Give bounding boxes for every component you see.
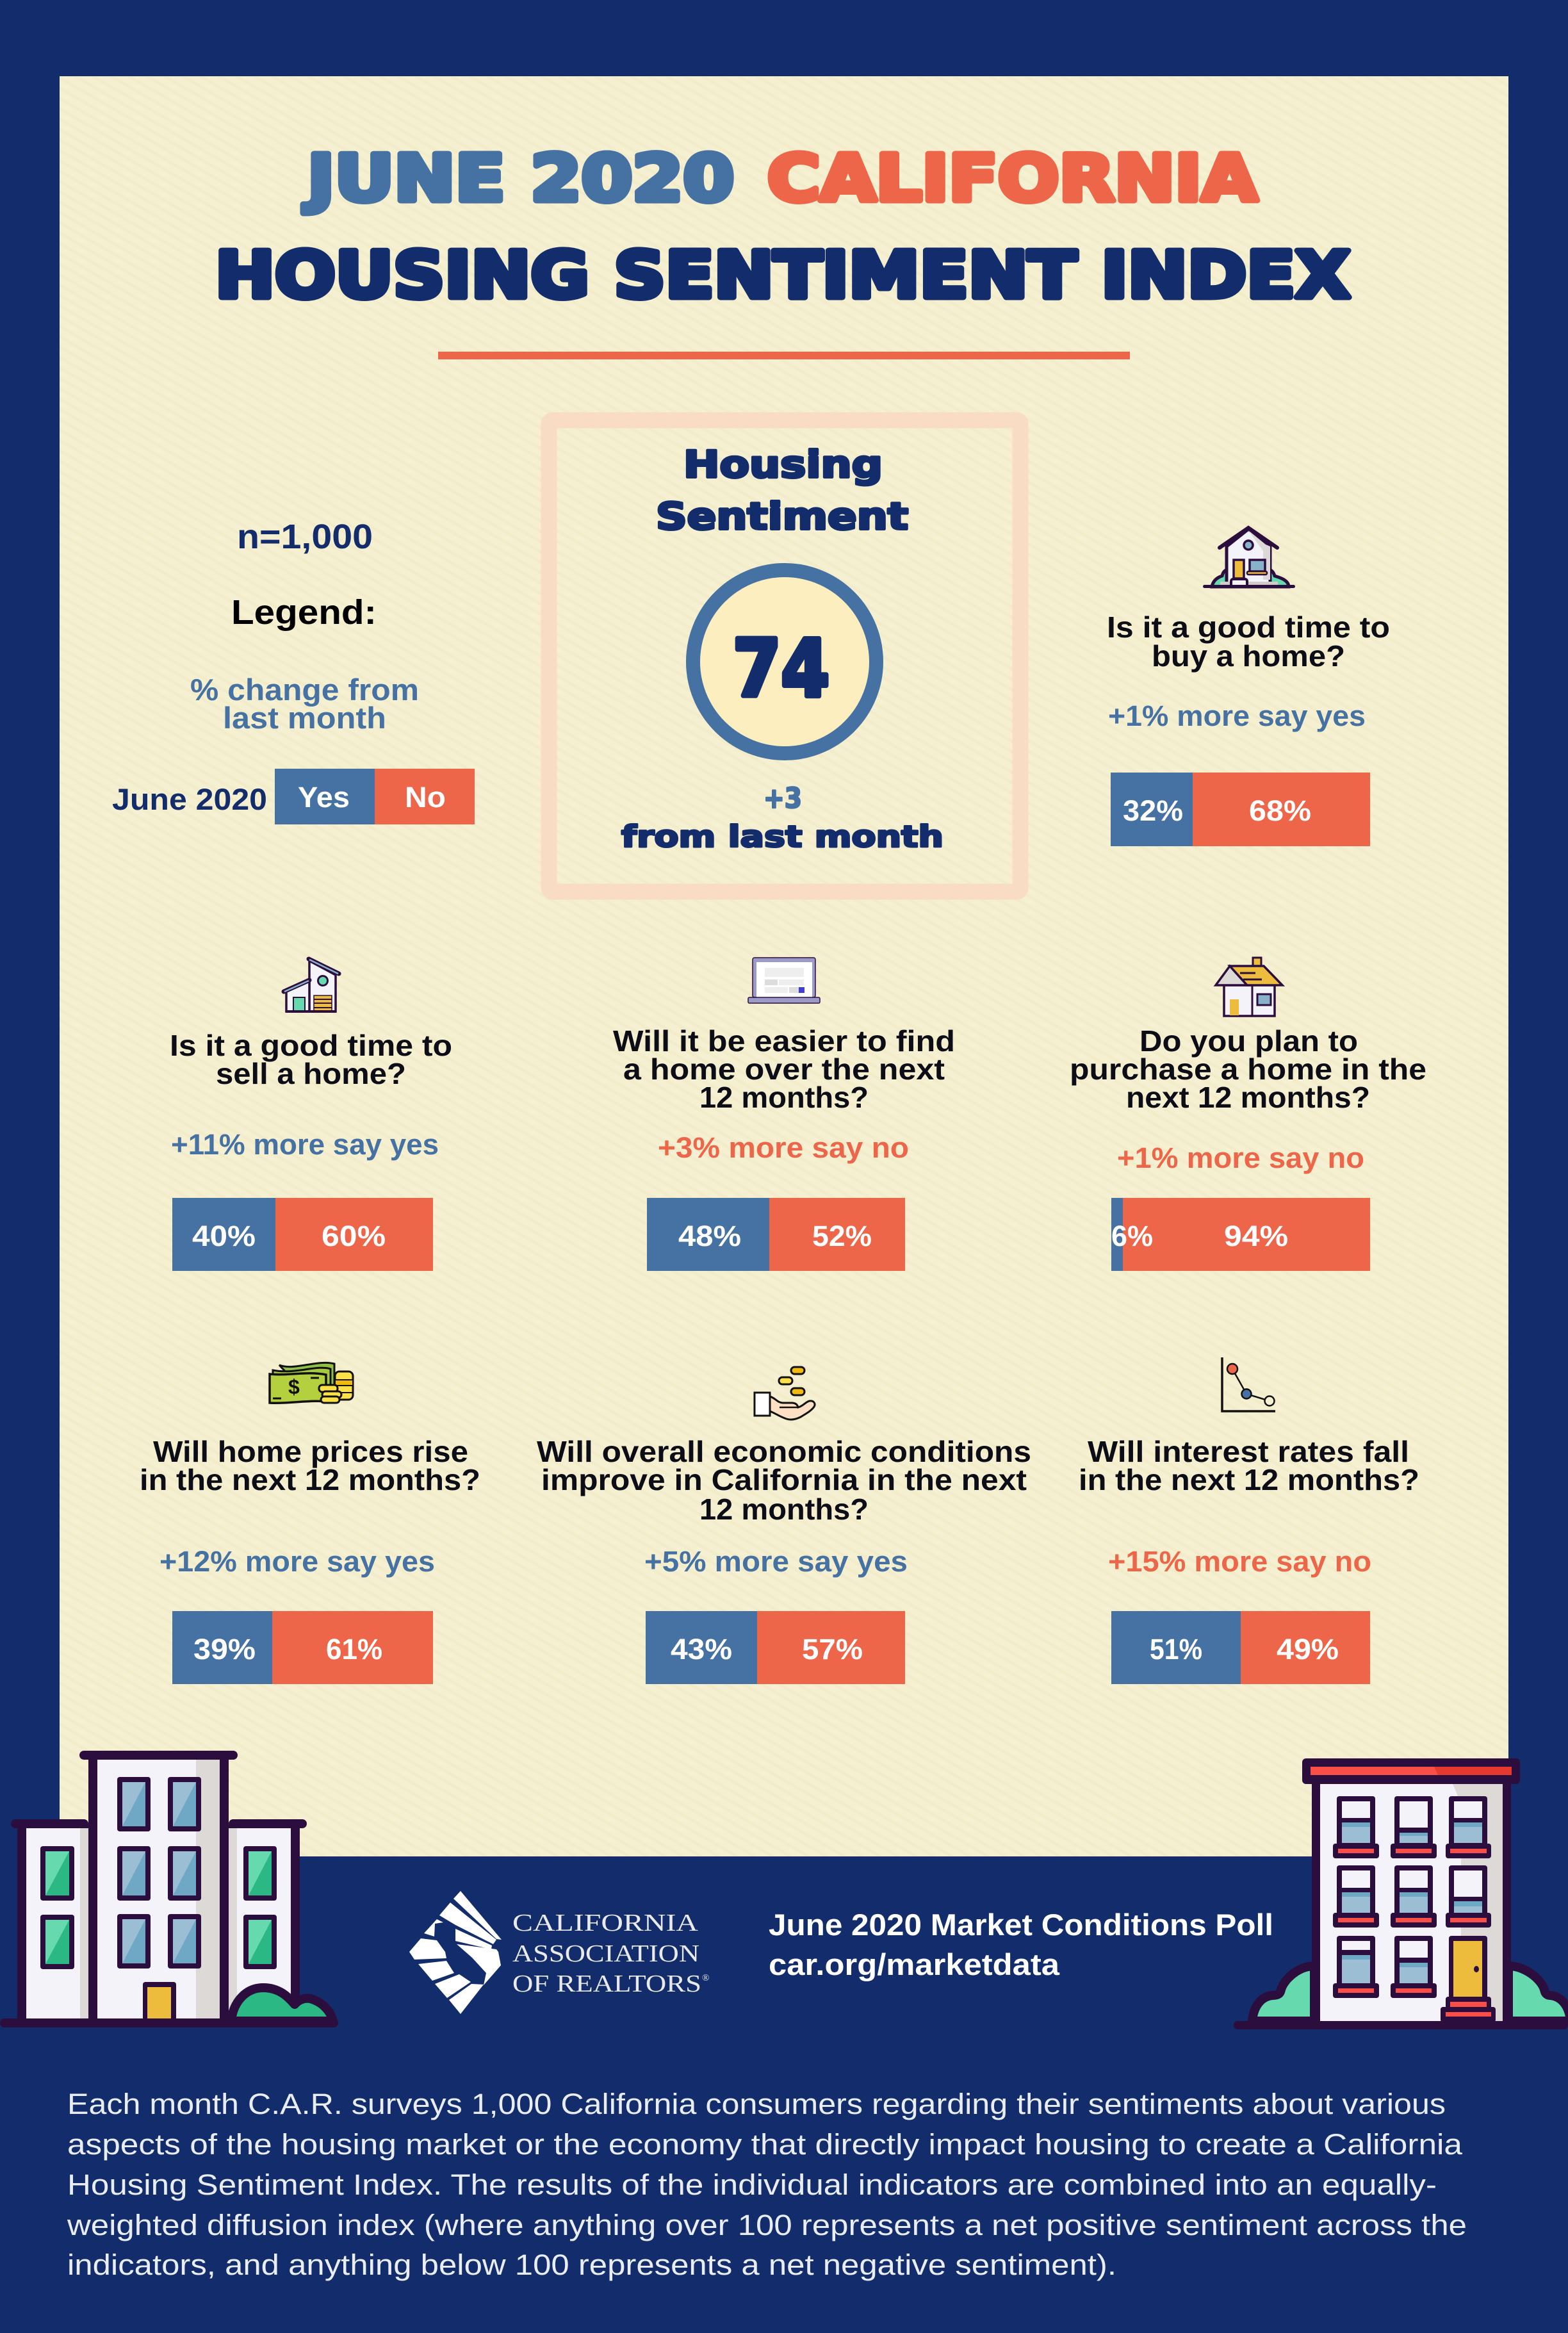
question: purchase a home in the — [1070, 1052, 1426, 1086]
panel: legend: June 2020 — [112, 782, 267, 816]
bushes — [1252, 1966, 1568, 2021]
question — [537, 1435, 1031, 1526]
bar: 32 yes 68 no — [1111, 773, 1370, 846]
panel: housing sentiment score: 74 — [733, 623, 829, 714]
title: JUNE 2020 — [303, 141, 734, 216]
methodology paragraph: aspects of the housing market or the economy that directly impact housing to create a California — [67, 2128, 1463, 2161]
methodology paragraph: Each month C.A.R. surveys 1,000 California consumers regarding their sentiments about various — [67, 2088, 1446, 2120]
bar: 39 yes 61 no: 39% — [193, 1633, 256, 1666]
bar: 40 yes 60 no: 40% — [192, 1220, 256, 1252]
bar: 32 yes 68 no: 32% — [1123, 794, 1183, 827]
panel: good time to buy — [1107, 528, 1390, 846]
logo wordmark: ® — [702, 1973, 709, 1983]
panel: housing sentiment score: Housing — [683, 443, 883, 486]
bar: 40 yes 60 no: 60% — [322, 1220, 386, 1252]
change label: +3% more say no — [658, 1131, 909, 1164]
question: 12 months? — [699, 1081, 869, 1114]
question: buy a home? — [1152, 639, 1345, 673]
change label: +15% more say no — [1108, 1545, 1371, 1578]
panel: legend: % change from — [190, 673, 419, 707]
bar: 6 yes 94 no: 6% — [1111, 1220, 1153, 1252]
question: improve in California in the next — [541, 1463, 1027, 1496]
bar: 39 yes 61 no: 61% — [326, 1633, 382, 1666]
question — [613, 1024, 955, 1114]
title: HOUSING SENTIMENT INDEX — [215, 238, 1350, 313]
question: sell a home? — [216, 1057, 406, 1090]
change label: +1% more say no — [1117, 1142, 1364, 1174]
bar: 48 yes 52 no: 48% — [678, 1220, 741, 1252]
question: Is it a good time to — [170, 1029, 452, 1062]
bar: 51 yes 49 no: 49% — [1277, 1633, 1339, 1666]
panel: home prices — [140, 1363, 480, 1684]
question — [170, 1029, 452, 1090]
panel: housing sentiment score — [549, 420, 1020, 892]
title: CALIFORNIA — [767, 141, 1257, 216]
footer source text — [769, 1908, 1273, 1981]
panel: housing sentiment score: +3 — [764, 782, 802, 815]
methodology paragraph — [67, 2088, 1467, 2281]
question — [140, 1435, 480, 1496]
bar: 40 yes 60 no — [172, 1198, 433, 1271]
icon: money and coins: $ — [288, 1375, 300, 1398]
logo wordmark: CALIFORNIA — [512, 1910, 699, 1936]
door and steps — [1441, 1936, 1496, 2022]
question: in the next 12 months? — [1079, 1463, 1419, 1496]
logo: California Association of Realtors — [409, 1891, 709, 2014]
panel: legend: last month — [223, 701, 386, 735]
question: 12 months? — [699, 1493, 869, 1526]
panel: interest rates — [1079, 1357, 1419, 1684]
icon: hand with coins — [755, 1367, 815, 1420]
question: Will home prices rise — [153, 1435, 468, 1468]
title — [215, 141, 1350, 313]
bar: 39 yes 61 no — [172, 1611, 433, 1684]
bar: 48 yes 52 no: 52% — [812, 1220, 872, 1252]
footer source text: June 2020 Market Conditions Poll — [769, 1908, 1273, 1942]
panel: legend: Yes — [298, 781, 350, 814]
icon: yellow roof house — [1216, 958, 1282, 1016]
cream panel — [60, 76, 1508, 1856]
footer source text: car.org/marketdata — [769, 1947, 1060, 1981]
panel: housing sentiment score: Sentiment — [656, 495, 908, 538]
change label: +5% more say yes — [644, 1545, 908, 1578]
title rule — [438, 352, 1130, 359]
methodology paragraph: Housing Sentiment Index. The results of the individual indicators are combined into an equally- — [67, 2168, 1437, 2201]
logo mark — [409, 1891, 502, 2014]
question: Will interest rates fall — [1088, 1435, 1409, 1468]
panel: good time to sell — [170, 959, 452, 1271]
question — [1070, 1024, 1426, 1114]
logo wordmark — [512, 1910, 709, 1997]
icon: falling line chart — [1222, 1357, 1275, 1411]
illustration: right apartment building — [1234, 1758, 1568, 2029]
question — [1079, 1435, 1419, 1496]
window sills — [1333, 1844, 1491, 1998]
panel: easier to find — [613, 958, 955, 1271]
panel: economic conditions — [537, 1367, 1031, 1684]
bar: 6 yes 94 no — [1111, 1198, 1370, 1271]
bar: 32 yes 68 no: 68% — [1249, 794, 1311, 827]
icon: sell house — [284, 959, 339, 1013]
change label: +11% more say yes — [171, 1128, 439, 1161]
panel: plan to purchase — [1070, 958, 1426, 1271]
side wing windows — [40, 1846, 277, 1969]
door — [143, 1982, 176, 2020]
illustration: left apartment building — [0, 1751, 338, 2027]
change label: +12% more say yes — [159, 1545, 435, 1578]
window grid — [1337, 1796, 1487, 1988]
change label: +1% more say yes — [1108, 700, 1366, 732]
question: a home over the next — [623, 1052, 945, 1086]
question: Will it be easier to find — [613, 1024, 955, 1058]
question: next 12 months? — [1126, 1081, 1370, 1114]
question: Will overall economic conditions — [537, 1435, 1031, 1468]
logo wordmark: ASSOCIATION — [512, 1940, 699, 1967]
question: in the next 12 months? — [140, 1463, 480, 1496]
logo wordmark: OF REALTORS — [512, 1970, 701, 1997]
bar: 51 yes 49 no — [1111, 1611, 1370, 1684]
question — [1107, 610, 1390, 673]
icon: money and coins — [270, 1363, 353, 1403]
panel: housing sentiment score: from last month — [621, 819, 943, 854]
bar: 48 yes 52 no — [647, 1198, 905, 1271]
question: Do you plan to — [1139, 1024, 1358, 1058]
question: Is it a good time to — [1107, 610, 1390, 644]
bush — [231, 1988, 333, 2021]
central tower windows — [117, 1777, 201, 1969]
bar: 43 yes 57 no: 57% — [802, 1633, 863, 1666]
panel: legend: No — [405, 781, 446, 814]
bar: 43 yes 57 no — [646, 1611, 905, 1684]
methodology paragraph: weighted diffusion index (where anything over 100 represents a net positive sentiment across the — [67, 2209, 1467, 2241]
panel: legend: n=1,000 — [237, 518, 373, 556]
methodology paragraph: indicators, and anything below 100 represents a net negative sentiment). — [67, 2248, 1116, 2281]
panel: legend: Legend: — [231, 593, 377, 632]
bar: 51 yes 49 no: 51% — [1150, 1633, 1202, 1666]
bar: 6 yes 94 no: 94% — [1224, 1220, 1288, 1252]
bar: 43 yes 57 no: 43% — [671, 1633, 732, 1666]
panel: legend — [112, 518, 475, 824]
icon: house — [1203, 528, 1295, 588]
icon: laptop — [748, 958, 820, 1003]
